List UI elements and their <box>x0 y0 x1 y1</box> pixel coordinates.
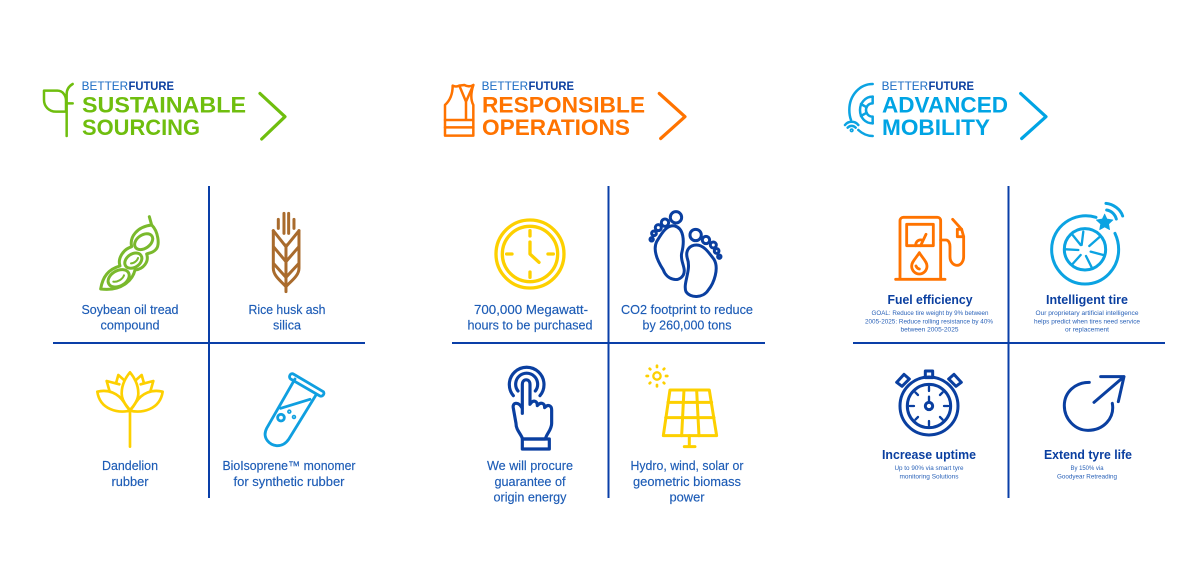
cell: guarantee of origin: We will procure <box>487 459 573 473</box>
cell: fuel efficiency: Fuel efficiency <box>888 292 973 307</box>
cell: hydro wind solar <box>630 366 744 504</box>
cell: fuel efficiency: GOAL: Reduce tire weight by 9% between <box>872 310 989 317</box>
cell: guarantee of origin: origin energy <box>494 490 567 504</box>
arrow: chevron orange <box>659 94 685 138</box>
cell: increase uptime <box>882 371 976 480</box>
arrow: chevron green <box>260 94 285 139</box>
cell: increase uptime: Up to 90% via smart tyre <box>894 465 964 472</box>
panel: responsible operations <box>445 81 753 504</box>
cell: extend tyre life: Extend tyre life <box>1044 447 1132 462</box>
cell: guarantee of origin: guarantee of <box>494 475 566 489</box>
cell: intelligent tire <box>1034 203 1140 334</box>
cell: co2 footprint: CO2 footprint to reduce <box>621 303 753 317</box>
cell: extend tyre life: By 150% via <box>1070 465 1104 472</box>
cell: intelligent tire: or replacement <box>1065 326 1109 334</box>
cell: bioisoprene: BioIsoprene™ monomer <box>222 459 356 473</box>
cell: soybean: compound <box>100 318 160 332</box>
cell: dandelion <box>97 372 163 489</box>
icon: soybean pod <box>101 217 158 291</box>
cell: guarantee of origin <box>487 367 573 504</box>
heading: sustainable sourcing <box>44 81 285 140</box>
cell: co2 footprint <box>621 212 753 332</box>
heading: responsible operations: FUTURE <box>528 81 574 93</box>
cell: hydro wind solar: geometric biomass <box>633 475 741 489</box>
cell: fuel efficiency: between 2005-2025 <box>900 326 959 334</box>
cell: fuel efficiency: 2005-2025: Reduce rolling resistance by 40% <box>865 318 993 326</box>
cell: hydro wind solar: power <box>670 490 704 504</box>
heading: responsible operations <box>445 81 685 140</box>
heading: responsible operations: OPERATIONS <box>482 115 630 140</box>
cell: co2 footprint: by 260,000 tons <box>642 318 732 332</box>
icon: fuel pump <box>896 217 964 279</box>
cell: intelligent tire: Intelligent tire <box>1046 292 1128 307</box>
cell: dandelion: rubber <box>112 475 148 489</box>
cell: extend tyre life: Goodyear Retreading <box>1057 474 1117 480</box>
icon: circle with arrow <box>1064 377 1124 430</box>
cell: rice husk <box>248 213 326 332</box>
icon: smart tire <box>1052 203 1123 284</box>
icon: sprout <box>44 84 73 136</box>
cell: megawatt hours: hours to be purchased <box>468 318 593 332</box>
cell: megawatt hours: 700,000 Megawatt- <box>474 303 588 317</box>
arrow: chevron blue <box>1021 94 1046 138</box>
cell: rice husk: Rice husk ash <box>248 303 326 317</box>
icon: lotus flower <box>97 372 163 447</box>
icon: stopwatch <box>897 371 961 435</box>
icon: footprints <box>650 212 721 296</box>
heading: sustainable sourcing: SOURCING <box>82 115 200 140</box>
heading: advanced mobility <box>845 81 1046 140</box>
cell: fuel efficiency <box>865 217 993 334</box>
cell: increase uptime: monitoring Solutions <box>900 474 959 480</box>
heading: sustainable sourcing: SUSTAINABLE <box>82 93 246 118</box>
icon: test tube <box>265 374 324 446</box>
panel: advanced mobility <box>845 81 1140 480</box>
cell: megawatt hours <box>468 220 593 332</box>
icon: hand pressing button <box>509 367 552 449</box>
cell: bioisoprene <box>222 374 356 489</box>
heading: sustainable sourcing: BETTER <box>82 81 128 93</box>
heading: advanced mobility: BETTER <box>882 81 928 93</box>
cell: soybean <box>82 217 179 332</box>
cell: soybean: Soybean oil tread <box>82 303 179 317</box>
cell: rice husk: silica <box>273 318 301 332</box>
icon: safety vest <box>445 85 473 136</box>
cell: bioisoprene: for synthetic rubber <box>234 475 344 489</box>
cell: intelligent tire: Our proprietary artificial intelligence <box>1036 310 1139 317</box>
icon: solar panel and sun <box>647 366 717 447</box>
cell: intelligent tire: helps predict when tires need service <box>1034 318 1140 326</box>
heading: responsible operations: BETTER <box>482 81 528 93</box>
cell: hydro wind solar: Hydro, wind, solar or <box>630 459 744 473</box>
cell: increase uptime: Increase uptime <box>882 447 976 462</box>
panel: sustainable sourcing <box>44 81 356 489</box>
heading: responsible operations: RESPONSIBLE <box>482 93 645 118</box>
heading: sustainable sourcing: FUTURE <box>128 81 174 93</box>
icon: clock <box>496 220 564 288</box>
icon: wheel and wifi <box>845 84 873 136</box>
heading: advanced mobility: ADVANCED <box>882 93 1008 118</box>
cell: extend tyre life <box>1044 377 1132 480</box>
icon: wheat <box>273 213 299 292</box>
cell: dandelion: Dandelion <box>102 459 158 473</box>
heading: advanced mobility: FUTURE <box>928 81 974 93</box>
heading: advanced mobility: MOBILITY <box>882 115 990 140</box>
